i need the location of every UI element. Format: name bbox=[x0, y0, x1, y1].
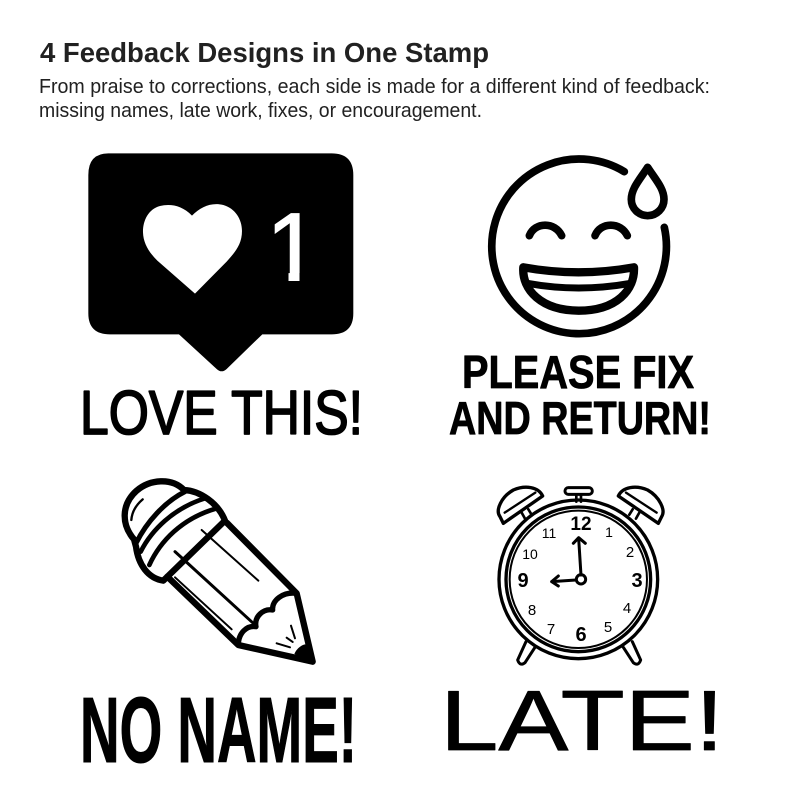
like count: 1 bbox=[266, 193, 320, 302]
label: late: LATE! bbox=[440, 674, 724, 769]
label: please fix and return: AND RETURN! bbox=[449, 392, 711, 444]
label: please fix and return bbox=[449, 346, 711, 444]
clock numerals: 12 bbox=[570, 514, 592, 535]
label: please fix and return: PLEASE FIX bbox=[462, 346, 694, 398]
clock numerals: 10 bbox=[522, 546, 538, 562]
label: no name: NO NAME! bbox=[80, 678, 357, 782]
clock numerals: 6 bbox=[575, 624, 587, 646]
clock numerals: 1 bbox=[605, 524, 613, 540]
clock numerals: 2 bbox=[626, 544, 634, 561]
icon: alarm clock bbox=[498, 487, 663, 664]
clock numerals: 8 bbox=[528, 602, 536, 619]
icon: heart bbox=[143, 204, 242, 294]
icon: pencil bbox=[125, 481, 314, 663]
clock numerals: 5 bbox=[604, 619, 612, 636]
subtitle text block bbox=[39, 76, 710, 122]
clock numerals: 3 bbox=[631, 570, 643, 592]
icon: sweat smile emoji bbox=[492, 159, 666, 334]
panel: late stamp bbox=[440, 487, 724, 769]
panel: love this stamp bbox=[80, 153, 363, 448]
subtitle text block: From praise to corrections, each side is made for a different kind of feedback: bbox=[39, 76, 710, 98]
panel: please fix stamp bbox=[449, 159, 711, 444]
clock numerals: 7 bbox=[547, 621, 555, 638]
icon: like notification bubble bbox=[88, 153, 353, 371]
label: love this: LOVE THIS! bbox=[80, 379, 363, 448]
title: 4 Feedback Designs in One Stamp bbox=[40, 37, 489, 68]
clock numerals: 9 bbox=[517, 570, 529, 592]
clock numerals: 4 bbox=[623, 600, 631, 617]
clock numerals: 11 bbox=[542, 525, 556, 541]
clock numerals bbox=[517, 514, 643, 646]
subtitle text block: missing names, late work, fixes, or encouragement. bbox=[39, 100, 482, 122]
panel: no name stamp bbox=[80, 481, 357, 782]
